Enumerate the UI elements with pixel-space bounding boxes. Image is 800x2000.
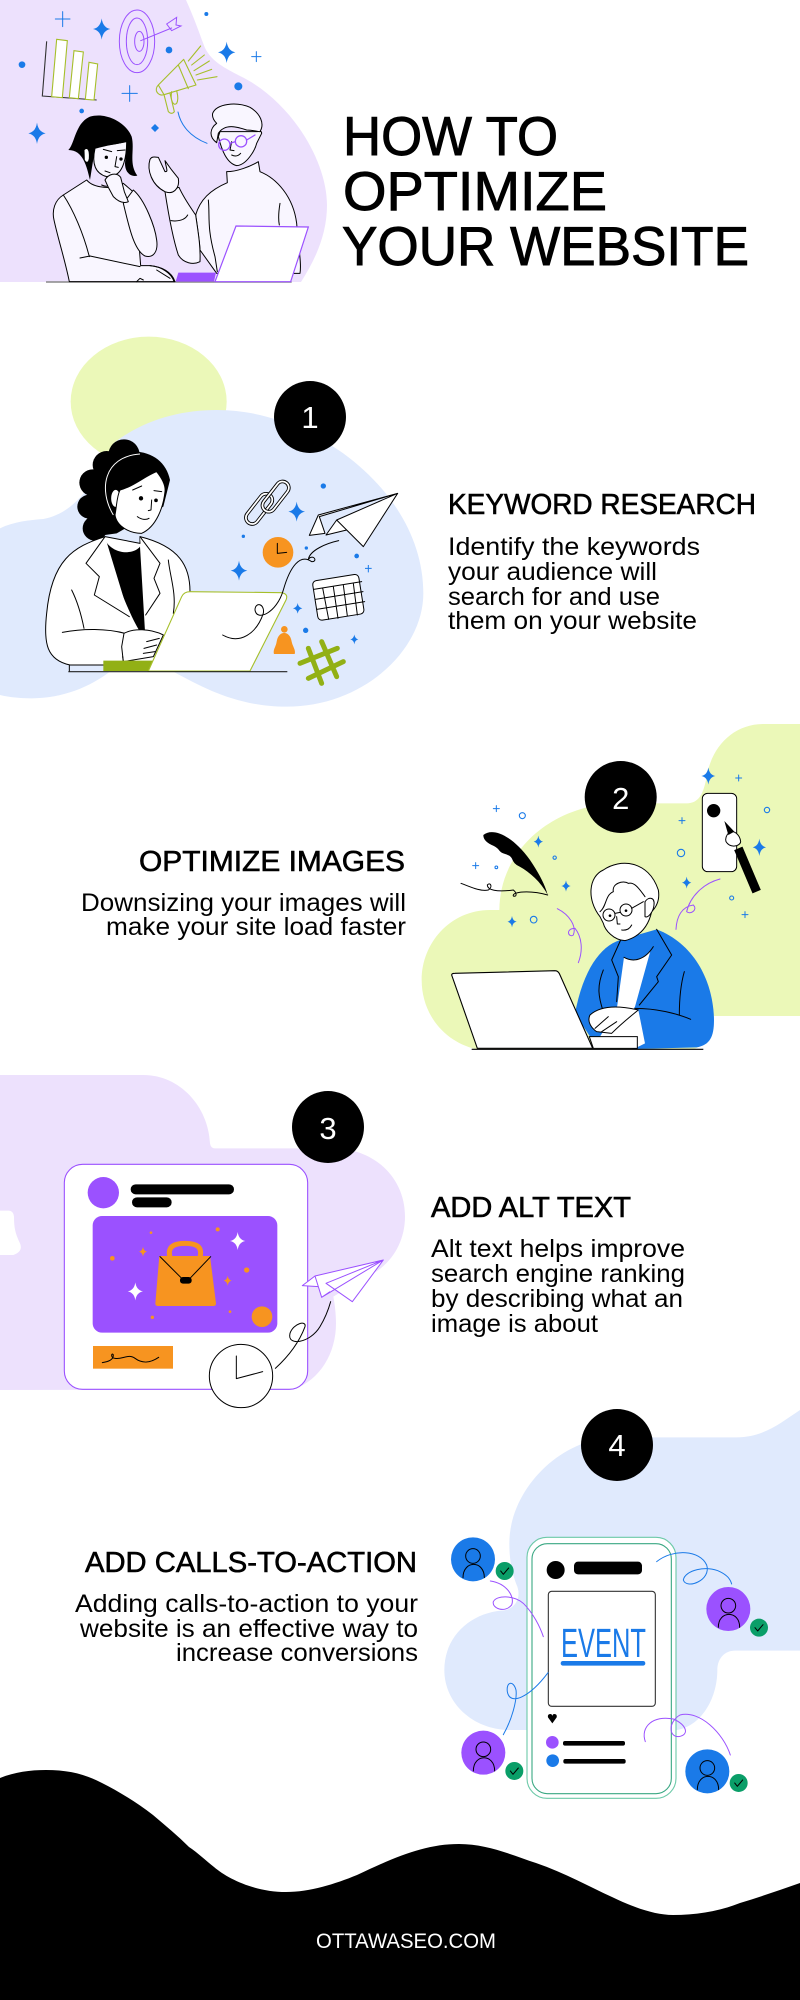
woman at laptop (46, 439, 287, 672)
footer wave (0, 1770, 800, 2000)
number badge 2 (585, 761, 657, 833)
title: YOUR WEBSITE (342, 215, 749, 277)
text: add calls-to-action (75, 1547, 418, 1667)
panel: step 2 illustration (422, 724, 800, 1049)
icon: chain link (243, 479, 291, 527)
green blob (71, 337, 227, 467)
number badge 4 (581, 1409, 653, 1481)
squiggle (223, 541, 339, 639)
text: add calls-to-action: ADD CALLS-TO-ACTION (85, 1547, 417, 1579)
green blob (422, 724, 800, 1049)
text: keyword research: search for and use (448, 583, 660, 611)
text: optimize images: OPTIMIZE IMAGES (139, 846, 405, 878)
purple image with bag (93, 1216, 277, 1333)
number badge 4: 4 (608, 1428, 626, 1463)
purple squiggles (557, 879, 720, 963)
text: optimize images: Downsizing your images will (81, 889, 406, 917)
panel: header illustration (0, 0, 327, 282)
avatar and header lines (88, 1177, 234, 1208)
text: optimize images: make your site load faster (106, 913, 406, 941)
text: keyword research: KEYWORD RESEARCH (448, 489, 756, 521)
text: add alt text: image is about (431, 1310, 598, 1338)
number badge 1 (274, 381, 346, 453)
text: add calls-to-action: increase conversions (176, 1639, 418, 1667)
text: optimize images (81, 846, 406, 941)
text: keyword research: Identify the keywords (448, 533, 700, 561)
number badge 2: 2 (612, 781, 629, 816)
number badge 1: 1 (301, 400, 319, 435)
number badge 3 (292, 1091, 364, 1163)
icon: orange person (274, 626, 295, 654)
event label: EVENT (561, 1620, 646, 1666)
text: add alt text (431, 1192, 685, 1338)
post card (64, 1164, 308, 1389)
text: add alt text: ADD ALT TEXT (431, 1192, 631, 1224)
icon: clock (263, 537, 293, 568)
title: HOW TO (343, 105, 558, 167)
text: keyword research (448, 489, 756, 635)
text: add calls-to-action: Adding calls-to-action to your (75, 1590, 418, 1618)
avatar: blue top left (451, 1537, 514, 1581)
icon: hashtag (300, 642, 343, 683)
avatar: blue bottom right (685, 1749, 748, 1793)
sparkles, plus signs and rings (473, 767, 770, 927)
orange button (93, 1346, 173, 1369)
blue blob (444, 1410, 800, 1730)
lavender blob (0, 1075, 405, 1390)
squiggle (275, 1302, 331, 1368)
icon: paper plane (309, 493, 398, 547)
title (342, 105, 749, 277)
man at laptop (452, 863, 714, 1049)
blue blob (0, 410, 423, 707)
text: keyword research: them on your website (448, 607, 697, 635)
event underline (561, 1661, 645, 1666)
title: OPTIMIZE (343, 160, 607, 222)
people with laptop (46, 104, 308, 282)
footer text: OTTAWASEO.COM (316, 1930, 496, 1953)
avatar: purple bottom left (461, 1731, 523, 1780)
lavender background blob (0, 0, 327, 282)
panel: step 1 illustration (0, 337, 423, 707)
text: add calls-to-action: website is an effective way to (79, 1615, 418, 1643)
phone (527, 1537, 676, 1798)
clock (209, 1344, 273, 1408)
avatar: purple right (706, 1587, 768, 1637)
number badge 3: 3 (319, 1111, 337, 1146)
sparkles and dots (231, 483, 372, 644)
panel: step 4 illustration (444, 1410, 800, 1798)
icon: quill (461, 832, 548, 896)
paper plane (302, 1260, 383, 1302)
icon: calendar (312, 574, 365, 621)
text: keyword research: your audience will (448, 558, 657, 586)
icon: image card with brush (702, 793, 757, 892)
panel: step 3 illustration (0, 1075, 405, 1408)
icons above the people (19, 10, 261, 144)
curly connectors (490, 1553, 732, 1755)
text: add alt text: Alt text helps improve (431, 1235, 685, 1263)
text: add alt text: by describing what an (431, 1285, 683, 1313)
text: add alt text: search engine ranking (431, 1260, 685, 1288)
